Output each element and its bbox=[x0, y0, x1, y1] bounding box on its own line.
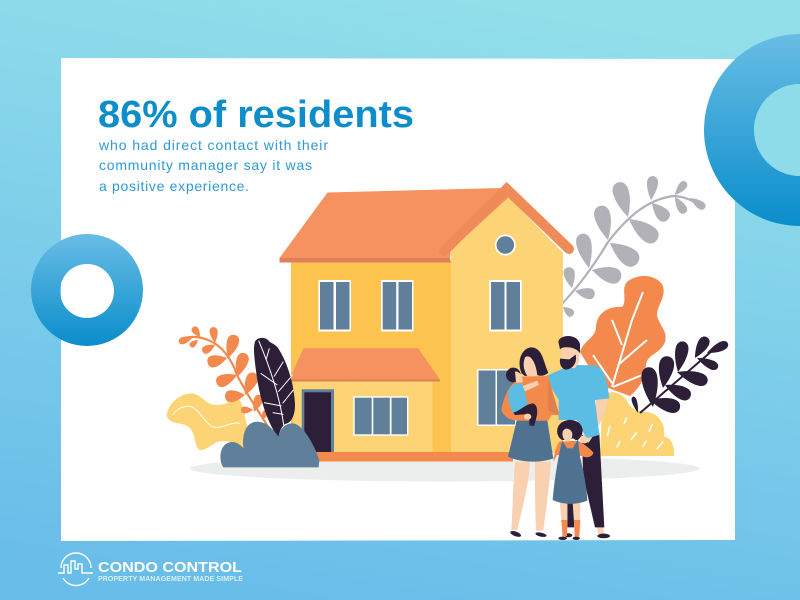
dark branch right bbox=[631, 334, 730, 415]
blue bush left bbox=[220, 422, 319, 467]
door bbox=[302, 389, 334, 452]
logo icon bbox=[58, 553, 93, 586]
porch roof shadow bbox=[289, 380, 440, 382]
porch roof bbox=[289, 348, 440, 380]
girl bbox=[553, 420, 593, 540]
porch wall bbox=[293, 380, 432, 453]
toddler bbox=[506, 368, 539, 426]
round window glass bbox=[496, 236, 514, 254]
gable roof trim bbox=[444, 189, 569, 251]
yellow bush right bbox=[600, 392, 674, 456]
yellow wavy leaf left bbox=[167, 393, 247, 450]
lower right window bbox=[477, 369, 517, 426]
main roof bbox=[280, 188, 511, 258]
description text: a positive experience. bbox=[99, 178, 249, 194]
decorative ring: top right bbox=[704, 34, 800, 226]
dark leaf left bbox=[254, 338, 295, 437]
white panel bbox=[61, 58, 735, 541]
house bbox=[280, 188, 569, 462]
ground shadow bbox=[190, 456, 700, 482]
woman bbox=[501, 347, 559, 538]
roof shadow strip bbox=[280, 258, 451, 262]
upper window 1 bbox=[318, 280, 351, 332]
upper window 2 bbox=[381, 280, 414, 332]
description text: who had direct contact with their bbox=[98, 137, 328, 153]
gable wall bbox=[451, 195, 563, 453]
family bbox=[501, 336, 610, 540]
left wing wall bbox=[291, 262, 452, 453]
logo tagline: PROPERTY MANAGEMENT MADE SIMPLE bbox=[98, 576, 243, 583]
logo name: CONDO CONTROL bbox=[98, 560, 242, 576]
round window bbox=[495, 234, 516, 256]
orange large leaf bbox=[580, 276, 666, 396]
gray branch bbox=[560, 176, 707, 318]
description text: community manager say it was bbox=[99, 157, 312, 173]
man bbox=[545, 336, 610, 538]
lower window bbox=[353, 396, 408, 436]
upper window 3 bbox=[489, 280, 522, 332]
orange branch left bbox=[178, 325, 270, 430]
ring hole: top right bbox=[754, 84, 800, 176]
foundation bbox=[316, 452, 513, 462]
heading: 86% of residents bbox=[98, 94, 414, 136]
description text bbox=[98, 137, 328, 194]
decorative ring: left bbox=[31, 234, 143, 346]
logo bbox=[58, 553, 243, 586]
